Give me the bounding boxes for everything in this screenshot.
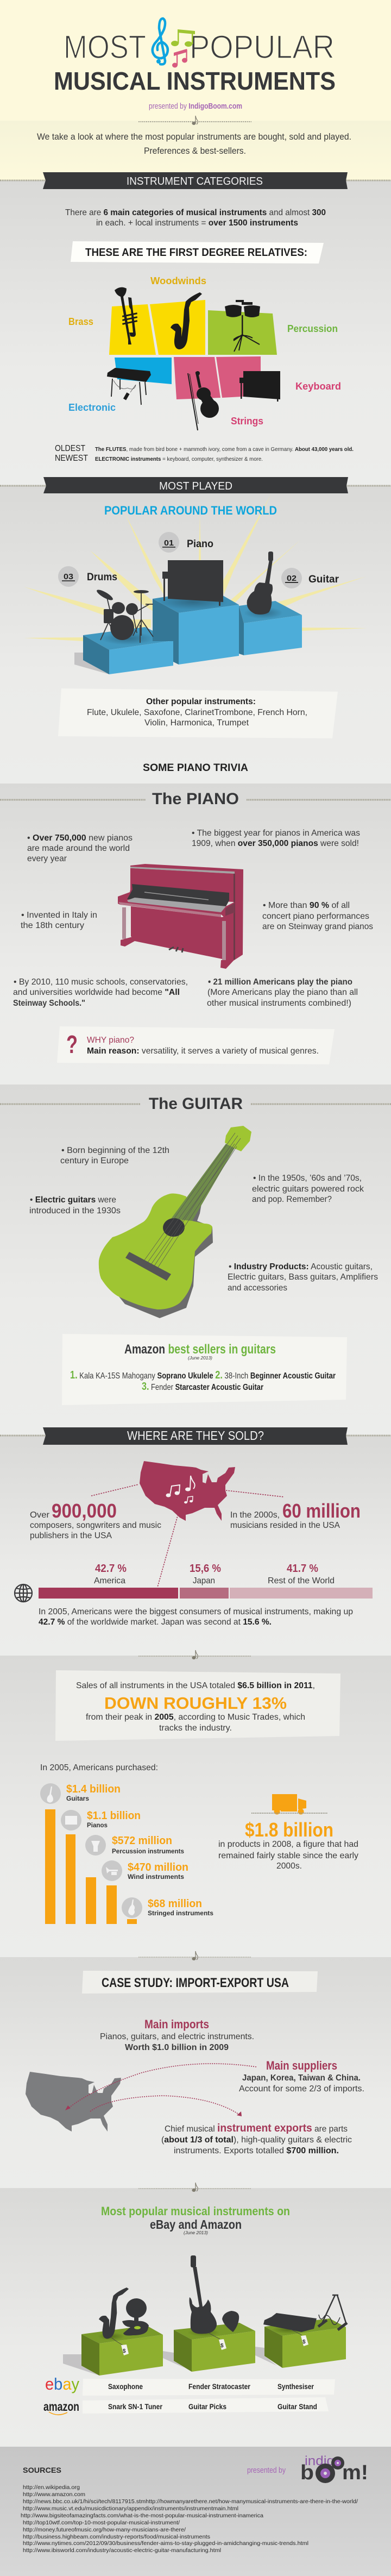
stat: 1.8 billion: remained fairly stable since the early <box>218 1851 358 1860</box>
illustration: red upright piano <box>118 864 243 969</box>
fact: 21 million americans: • 21 million Americans play the piano <box>208 977 352 987</box>
item: percussion <box>85 1835 184 1856</box>
item: guitars: $1.4 billion <box>66 1783 121 1795</box>
podium rank 03 drums <box>58 566 117 587</box>
fact: rock and pop: and pop. Remember? <box>252 1195 332 1204</box>
banner: where are they sold: WHERE ARE THEY SOLD? <box>127 1428 264 1443</box>
fact: rock and pop: • In the 1950s, ’60s and ’70s, <box>253 1174 362 1183</box>
fact: steinway concerts: • More than 90 % of all <box>263 901 350 910</box>
stat: 60 million musicians <box>230 1500 361 1530</box>
item: percussion: Percussion instruments <box>112 1847 184 1855</box>
text: main imports: Main imports <box>144 2017 209 2031</box>
title <box>54 29 336 95</box>
fact: steinway schools <box>13 977 188 1008</box>
banner: where are they sold <box>43 1427 348 1445</box>
panel: sales down 13 percent: tracks the industry. <box>159 1723 232 1733</box>
source links: http://business.highbeam.com/industry-reports/food/musical-instruments <box>23 2534 210 2540</box>
stat: 900,000 composers <box>30 1500 161 1540</box>
panel: amazon best sellers: 1. Kala KA-15S Mahogany Soprano Ukulele 2. 38-Inch Beginner Acoustic Guitar <box>70 1369 336 1381</box>
fact: electric guitars: • Electric guitars were <box>30 1195 116 1205</box>
source links: http://www.ibisworld.com/industry/acoustic-electric-guitar-manufacturing.html <box>23 2547 221 2554</box>
icon: podium piano <box>162 560 223 606</box>
banner: instrument categories: INSTRUMENT CATEGORIES <box>127 176 263 187</box>
text: main suppliers: Main suppliers <box>266 2059 337 2072</box>
item: pianos: $1.1 billion <box>87 1810 141 1822</box>
fact: biggest year: 1909, when over 350,000 pianos were sold! <box>192 839 359 848</box>
heading: case study: CASE STUDY: IMPORT-EXPORT USA <box>102 1976 289 1990</box>
fact: steinway schools: • By 2010, 110 music schools, conservatories, <box>14 977 188 987</box>
text: chief exports: Chief musical instrument exports are parts <box>165 2122 348 2134</box>
stat: 60 million musicians: In the 2000s, <box>230 1510 280 1520</box>
text: chief exports: instruments. Exports totalled $700 million. <box>174 2146 339 2155</box>
icon: podium drum kit <box>96 588 153 643</box>
table row: ebay <box>83 2379 335 2396</box>
relatives heading strip <box>71 241 324 264</box>
panel: why piano <box>57 1026 335 1064</box>
fact: invented in italy: the 18th century <box>21 921 84 930</box>
fact: born in europe: century in Europe <box>60 1156 129 1165</box>
fact: industry products: • Industry Products: Acoustic guitars, <box>229 1262 373 1271</box>
source links: http://money.futureofmusic.org/how-many-musicians-are-there/ <box>23 2527 186 2533</box>
fact: industry products: Electric guitars, Bass guitars, Amplifiers <box>228 1273 378 1282</box>
table row: amazon: Guitar Picks <box>188 2402 226 2411</box>
text: market summary <box>39 1607 353 1627</box>
tag: guitar <box>209 2333 226 2350</box>
icon: pink notes <box>172 49 187 67</box>
table row: amazon: Guitar Stand <box>278 2402 317 2411</box>
fact: electric guitars: introduced in the 1930s <box>29 1206 121 1215</box>
icon: electric guitar on box <box>189 2255 217 2334</box>
logo: ebay: ebay <box>45 2374 79 2393</box>
podium rank 02 guitar <box>281 568 339 588</box>
podium rank 02 guitar: Guitar <box>308 574 339 585</box>
item: strings: Stringed instruments <box>148 1909 213 1917</box>
fact: steinway schools: and universities worldwide had become "All <box>13 988 180 997</box>
panel: sales down 13 percent: Sales of all instruments in the USA totaled $6.5 billion in 2011, <box>76 1681 315 1690</box>
illustration: green guitar <box>99 1126 251 1318</box>
panel: other popular instruments: Flute, Ukulele, Saxofone, ClarinetTrombone, French Horn, <box>87 708 307 717</box>
tag: guitar: $ <box>220 2343 224 2349</box>
table row: ebay: Fender Stratocaster <box>188 2382 250 2391</box>
presented by logo: m! <box>342 2461 368 2484</box>
source links: http://news.bbc.co.uk/1/hi/sci/tech/8117915.stmhttp://howmanyarethere.net/how-manymusical-instruments-are-there-in-the-world/ <box>23 2498 358 2505</box>
stat: 1.8 billion <box>218 1819 358 1871</box>
stat: 60 million musicians: 60 million <box>282 1500 361 1522</box>
bar chart: purchases <box>45 1809 137 1924</box>
presented by logo: b <box>300 2461 314 2484</box>
dashed connector lines <box>91 1484 284 1587</box>
panel: why piano: WHY piano? <box>87 1036 134 1045</box>
podium rank 01 piano: 01 <box>164 538 174 548</box>
fact: rock and pop: electric guitars powered rock <box>252 1184 364 1194</box>
map: USA grey <box>26 2072 121 2132</box>
icon: bongos on stand <box>225 300 260 352</box>
text: main suppliers <box>239 2059 364 2094</box>
source links: http://www.music.vt.edu/musicdictionary/appendix/instruments/instrumentmain.html <box>23 2505 238 2512</box>
tag: synthesiser <box>291 2329 308 2346</box>
fact: rock and pop <box>252 1174 364 1204</box>
market share bar <box>39 1576 373 1599</box>
oldest and newest: NEWEST <box>55 454 88 463</box>
icon: green notes <box>171 29 195 47</box>
text: chief exports: (about 1/3 of total), high-quality guitars & electric <box>161 2135 352 2145</box>
fact: steinway schools: Steinway Schools." <box>13 999 85 1008</box>
title: MUSICAL INSTRUMENTS <box>54 67 336 95</box>
price tags <box>111 2329 308 2355</box>
presented by line: presented by IndigoBoom.com <box>149 102 242 111</box>
fact: invented in italy: • Invented in Italy in <box>21 911 97 920</box>
source links: http://www.nytimes.com/2012/09/30/business/fender-aims-to-stay-plugged-in-amidchanging-music-trends.html <box>23 2540 308 2547</box>
source links <box>21 2484 358 2554</box>
tag: synthesiser: $ <box>302 2339 306 2345</box>
table row: ebay: Saxophone <box>108 2382 143 2391</box>
heading: sources: SOURCES <box>23 2466 61 2474</box>
categories intro text <box>65 208 326 228</box>
icon: upright piano small <box>239 371 280 402</box>
logo: amazon: amazon <box>43 2399 79 2414</box>
text: in 2005 americans purchased: In 2005, Americans purchased: <box>40 1763 158 1772</box>
panel: sales down 13 percent: from their peak in 2005, according to Music Trades, which <box>86 1713 305 1722</box>
oldest and newest: OLDEST <box>55 444 85 453</box>
oldest and newest: The FLUTES, made from bird bone + mammoth ivory, come from a cave in Germany. About 43,000 years old. <box>95 446 354 453</box>
dotted line where sold <box>0 1434 391 1437</box>
text: chief exports <box>161 2122 352 2155</box>
dotted line instrument categories <box>0 179 391 181</box>
category labels: Woodwinds <box>150 275 206 286</box>
banner: most played <box>43 477 348 493</box>
market share percentages: 15,6 % <box>190 1563 221 1575</box>
divider with note <box>138 1650 251 1659</box>
market share percentages <box>95 1563 318 1575</box>
heading: some piano trivia: SOME PIANO TRIVIA <box>143 762 248 774</box>
intro text: Preferences & best-sellers. <box>144 146 246 156</box>
fact: 21 million americans: other musical instruments combined!) <box>207 999 351 1008</box>
category labels: Electronic <box>68 402 116 413</box>
panel: sales down 13 percent: DOWN ROUGHLY 13% <box>104 1694 287 1713</box>
stat: 60 million musicians: musicians resided in the USA <box>230 1521 340 1530</box>
source links: http://top10wtf.com/top-10-most-popular-musical-instrument/ <box>23 2519 180 2526</box>
table row: amazon <box>83 2397 329 2414</box>
item: percussion: $572 million <box>112 1835 172 1847</box>
yellow rays behind podium <box>24 494 367 641</box>
panel: other popular instruments <box>58 688 338 738</box>
text: market summary: In 2005, Americans were the biggest consumers of musical instruments, making up <box>39 1607 353 1616</box>
intro text: We take a look at where the most popular instruments are bought, sold and played. <box>37 131 351 142</box>
stat: 1.8 billion: $1.8 billion <box>245 1819 333 1841</box>
green display boxes <box>63 2318 346 2376</box>
item: strings <box>122 1897 213 1918</box>
heading: the piano: The PIANO <box>152 790 239 808</box>
item: guitars: Guitars <box>66 1795 89 1802</box>
oldest and newest <box>55 444 354 463</box>
text: main imports: Worth $1.0 billion in 2009 <box>125 2043 229 2052</box>
tag: saxophone: $ <box>123 2348 126 2354</box>
panel: other popular instruments: Violin, Harmonica, Trumpet <box>144 718 249 728</box>
source links: http://www.amazon.com <box>23 2491 85 2498</box>
piano trivia text blocks <box>13 829 373 1008</box>
oldest and newest: ELECTRONIC instruments = keyboard, computer, synthesizer & more. <box>95 456 263 462</box>
icon: trumpet <box>115 287 137 344</box>
icon: synthesiser on box <box>263 2313 317 2332</box>
source links: http://www.bigsiteofamazingfacts.com/what-is-the-most-popular-musical-instrument-inamerica <box>21 2512 263 2519</box>
banner: most played: MOST PLAYED <box>159 480 232 492</box>
panel: amazon best sellers: 3. Fender Starcaster Acoustic Guitar <box>142 1381 263 1393</box>
categories intro text: in each. + local instruments = over 1500 instruments <box>96 218 298 228</box>
item: wind <box>102 1860 188 1881</box>
podium rank 03 drums: Drums <box>87 572 117 583</box>
divider with note <box>138 116 251 125</box>
category labels: Brass <box>68 316 93 327</box>
icon: truck <box>251 1794 327 1815</box>
divider with note <box>138 2183 251 2192</box>
fact: new pianos a year: every year <box>27 854 67 863</box>
fact: biggest year: • The biggest year for pianos in America was <box>192 829 360 838</box>
icon: tuner on box <box>122 2298 149 2335</box>
fact: industry products: and accessories <box>228 1283 287 1293</box>
fact: born in europe <box>60 1146 169 1165</box>
fact: biggest year <box>192 829 360 848</box>
fact: electric guitars <box>29 1195 121 1215</box>
icon: guitar stand on box <box>318 2295 347 2330</box>
market share bar: Rest of the World <box>268 1576 335 1585</box>
panel: other popular instruments: Other popular instruments: <box>146 697 256 706</box>
panel: why piano: ? <box>66 1030 78 1058</box>
text: main suppliers: Account for some 2/3 of imports. <box>239 2084 364 2094</box>
stat: 900,000 composers: 900,000 <box>52 1500 117 1522</box>
presented by logo <box>247 2454 368 2484</box>
title: MOST <box>64 29 146 65</box>
stat: 900,000 composers: publishers in the USA <box>30 1531 112 1540</box>
categories intro text: There are 6 main categories of musical instruments and almost 300 <box>65 208 326 217</box>
item: wind: Wind instruments <box>128 1873 184 1881</box>
source links: http://en.wikipedia.org <box>23 2484 80 2491</box>
presented by logo: presented by <box>247 2466 286 2475</box>
podium rank 01 piano <box>159 532 213 553</box>
table row: ebay: Synthesiser <box>278 2382 314 2391</box>
fact: new pianos a year: • Over 750,000 new pianos <box>27 833 133 843</box>
tag: saxophone <box>111 2337 129 2355</box>
dotted line most played <box>0 485 391 487</box>
category labels: Keyboard <box>295 381 341 392</box>
icon: treble clef <box>153 18 168 64</box>
podium rank 03 drums: 03 <box>64 572 73 581</box>
heading: most popular on ebay and amazon: Most popular musical instruments on <box>101 2204 290 2218</box>
text: market summary: 42.7 % of the worldwide market. Japan was second at 15.6 %. <box>39 1618 272 1627</box>
map: USA with music notes <box>140 1461 235 1521</box>
item: wind: $470 million <box>128 1862 188 1873</box>
table row: amazon: Snark SN-1 Tuner <box>108 2402 162 2411</box>
fact: 21 million americans <box>207 977 358 1008</box>
text: main imports: Pianos, guitars, and electric instruments. <box>100 2032 254 2041</box>
heading: the guitar: The GUITAR <box>149 1095 243 1113</box>
divider with note <box>138 1951 251 1960</box>
fact: new pianos a year: are made around the world <box>27 844 130 853</box>
relatives heading strip: THESE ARE THE FIRST DEGREE RELATIVES: <box>85 247 307 259</box>
stat: 1.8 billion: 2000s. <box>276 1862 302 1871</box>
item: strings: $68 million <box>148 1898 202 1910</box>
icon: guitar pick on box <box>222 2311 239 2332</box>
heading: most popular on ebay and amazon <box>101 2204 290 2235</box>
heading: case study <box>82 1971 318 1994</box>
fact: born in europe: • Born beginning of the 12th <box>61 1146 169 1155</box>
item: guitars <box>40 1783 121 1804</box>
fact: 21 million americans: (More Americans play the piano than all <box>207 988 358 997</box>
icon: violin and bow <box>188 371 219 430</box>
fact: new pianos a year <box>27 833 133 863</box>
fact: steinway concerts: are on Steinway grand pianos <box>262 922 373 931</box>
intro text <box>37 131 351 156</box>
icon: podium guitar <box>247 551 273 615</box>
podium blocks <box>74 590 302 674</box>
stat: 900,000 composers: composers, songwriters and music <box>30 1521 161 1530</box>
heading: most popular on ebay and amazon: (June 2013) <box>184 2230 208 2235</box>
heading: most popular on ebay and amazon: eBay and Amazon <box>150 2217 242 2232</box>
panel: amazon best sellers: Amazon best sellers in guitars <box>124 1342 276 1357</box>
arrows: import and export arcs <box>65 2064 256 2116</box>
item: pianos: Pianos <box>87 1821 108 1829</box>
icon: saxophone <box>171 292 202 349</box>
category labels: Strings <box>231 416 263 427</box>
market share percentages: 41.7 % <box>287 1563 318 1575</box>
panel: why piano: Main reason: versatility, it serves a variety of musical genres. <box>87 1046 319 1056</box>
fact: invented in italy <box>21 911 97 930</box>
market share bar: Japan <box>193 1576 215 1585</box>
panel: amazon best sellers: (June 2013) <box>188 1356 212 1361</box>
podium rank 01 piano: Piano <box>187 538 213 550</box>
podium rank 02 guitar: 02 <box>287 574 297 583</box>
guitar trivia text blocks <box>29 1146 378 1293</box>
presented by logo: indig <box>305 2454 335 2468</box>
item: pianos <box>61 1810 141 1831</box>
title: POPULAR <box>190 29 335 65</box>
category labels: Percussion <box>287 323 338 334</box>
fact: industry products <box>228 1262 378 1293</box>
icon: saxophone on box <box>99 2287 129 2339</box>
icon: electronic keyboard <box>107 368 151 405</box>
fact: steinway concerts: concert piano performances <box>262 912 369 921</box>
fact: steinway concerts <box>262 901 373 931</box>
text: main imports <box>100 2017 254 2052</box>
stat: 1.8 billion: in products in 2008, a figure that had <box>218 1840 358 1849</box>
category labels <box>68 275 341 427</box>
text: main suppliers: Japan, Korea, Taiwan & China. <box>242 2073 361 2083</box>
heading: popular around the world: POPULAR AROUND THE WORLD <box>104 504 277 517</box>
panel: amazon best sellers <box>62 1334 347 1405</box>
market share bar: America <box>94 1576 125 1585</box>
category colour tiles <box>109 300 277 399</box>
stat: 900,000 composers: Over <box>30 1510 50 1520</box>
panel: sales down 13 percent <box>55 1670 340 1741</box>
market share percentages: 42.7 % <box>95 1563 127 1575</box>
banner: instrument categories <box>43 172 348 189</box>
icon: globe <box>15 1584 32 1602</box>
